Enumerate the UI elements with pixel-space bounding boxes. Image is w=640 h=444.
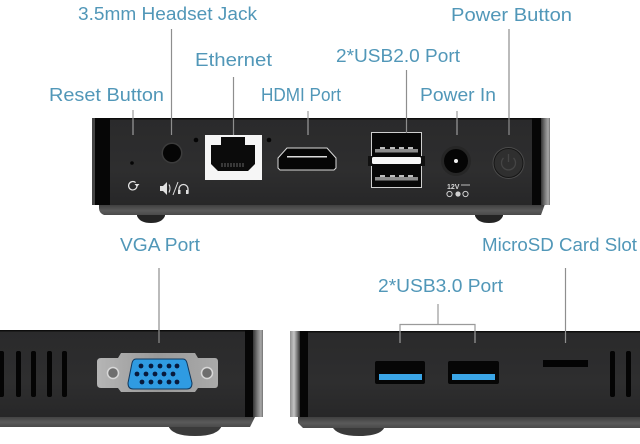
label: power button: Power Button [451,4,572,25]
leader line: reset button [132,110,134,135]
power in jack [441,146,471,197]
vents [0,351,67,397]
lip [0,415,256,427]
usb 3.0 port 1 [375,361,425,384]
leader line: headset jack [170,29,172,135]
device: rear view [92,118,550,223]
label: usb 2.0 port: 2*USB2.0 Port [336,45,460,66]
device: right side view with USB 3.0 and MicroSD [290,331,640,436]
device body [92,118,550,205]
leader line: power button [508,29,510,135]
bracket: usb 3.0 [400,304,475,343]
vga port [97,353,218,392]
leader line: vga [158,268,160,343]
label: ethernet: Ethernet [195,49,272,70]
foot: vga side [168,425,222,436]
device lip [99,204,545,215]
foot: rear left [137,213,165,223]
power button [492,147,524,179]
leader line: microsd [564,268,566,343]
label: reset button: Reset Button [49,84,164,105]
ethernet port [194,135,271,180]
label: microsd card slot: MicroSD Card Slot [482,234,637,255]
body [0,330,263,417]
leader line: usb 2.0 [406,70,408,133]
vents [610,351,631,397]
label: power in: Power In [420,84,496,105]
power in jack: 12V [447,184,460,191]
reset hole and icon [129,161,140,190]
usb 2.0 ports [368,132,425,188]
label: usb 3.0 port: 2*USB3.0 Port [378,275,503,296]
lip [298,416,640,428]
usb 3.0 port 2 [448,361,499,384]
label: hdmi port: HDMI Port [261,84,341,105]
headset jack and icon [160,142,188,195]
label: 3.5mm headset jack: 3.5mm Headset Jack [78,3,258,24]
foot: rear right [475,213,503,223]
device: left side view with VGA [0,330,263,436]
microsd slot [543,360,588,367]
foot: usb side [332,426,385,436]
label: vga port: VGA Port [120,234,200,255]
leader line: ethernet [232,77,234,135]
body [290,331,640,417]
leader line: power in [456,111,458,135]
leader line: hdmi [307,111,309,135]
hdmi port [278,148,336,170]
